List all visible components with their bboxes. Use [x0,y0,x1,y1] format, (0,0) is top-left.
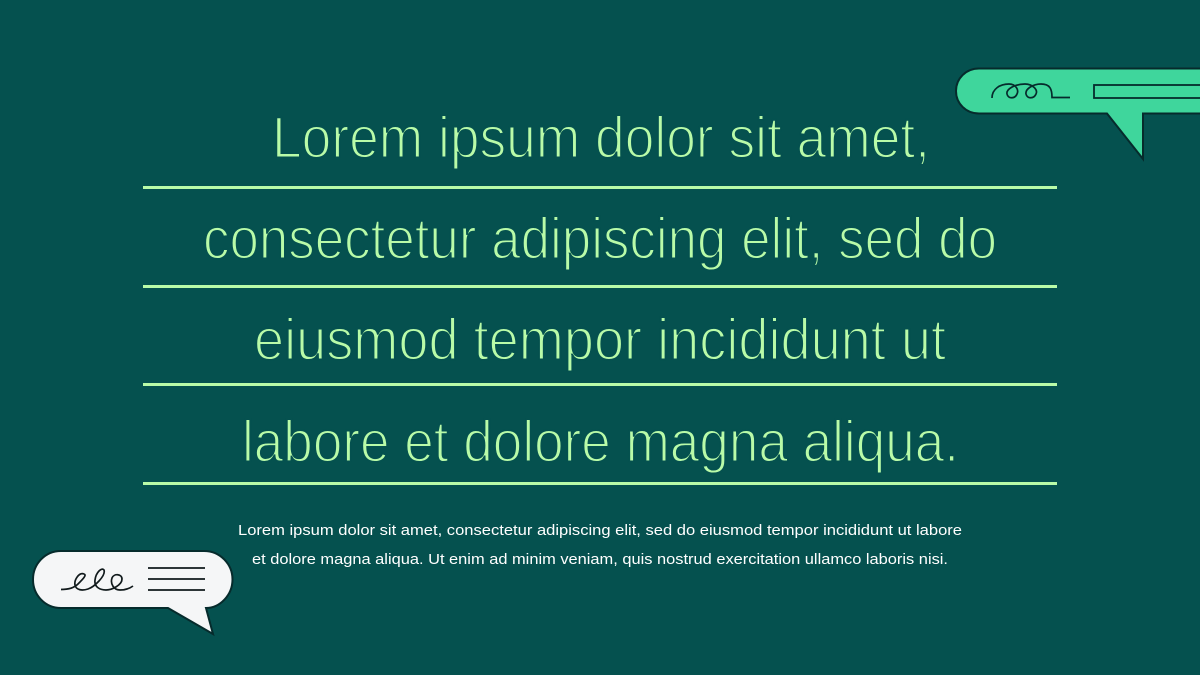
heading line 4: labore et dolore magna aliqua. [242,410,959,474]
heading line 1: Lorem ipsum dolor sit amet, [272,106,930,170]
bubble scribble [61,569,133,590]
bubble scribble [992,84,1070,98]
paragraph line 2: et dolore magna aliqua. Ut enim ad minim veniam, quis nostrud exercitation ullamco laboris nisi. [252,551,948,568]
bubble text lines [148,568,205,590]
heading line 2: consectetur adipiscing elit, sed do [203,206,997,272]
icon: white speech bubble [33,551,232,634]
heading line 3: eiusmod tempor incididunt ut [254,308,946,372]
heading: four ruled lines [203,106,997,474]
paragraph line 1: Lorem ipsum dolor sit amet, consectetur adipiscing elit, sed do eiusmod tempor incididunt ut labore [238,522,962,539]
body paragraph [238,522,962,568]
bubble text bar [1094,85,1200,98]
icon: green speech bubble [956,68,1200,159]
